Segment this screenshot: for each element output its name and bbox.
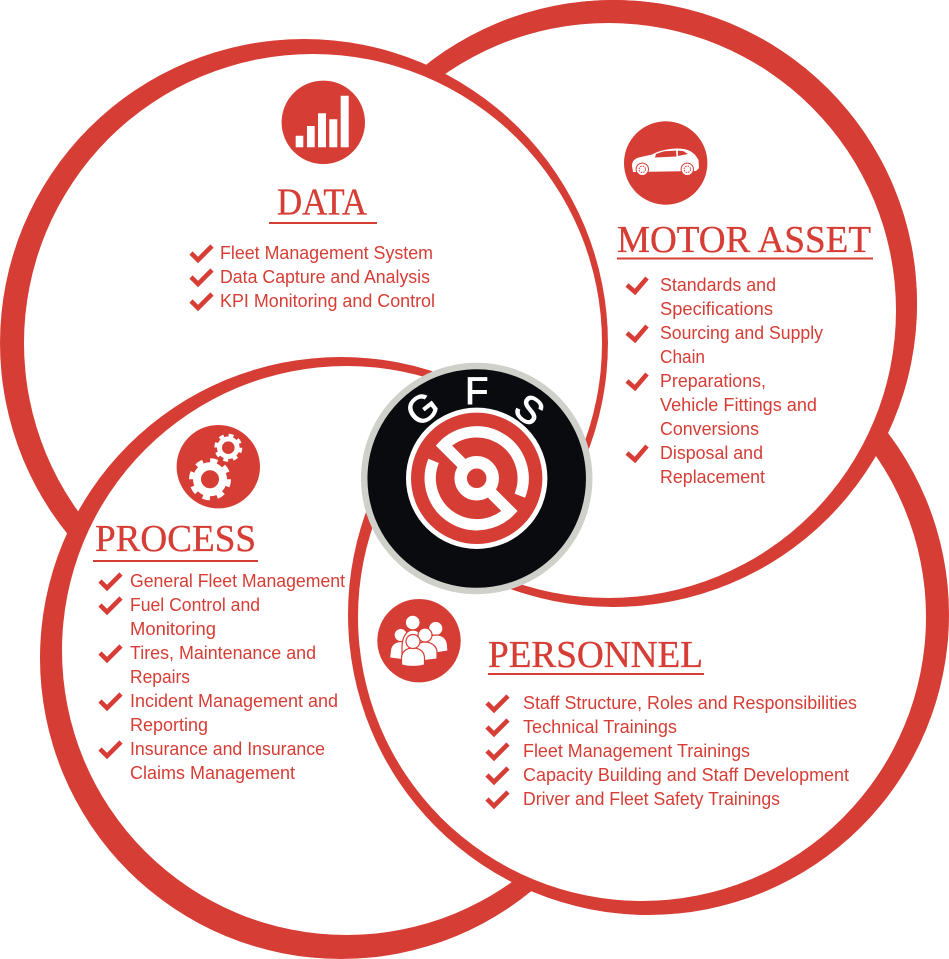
panel: process — [93, 425, 345, 783]
checklist: motor asset: Preparations, — [660, 371, 766, 391]
checklist: process — [100, 571, 345, 783]
checklist: motor asset: Replacement — [660, 467, 765, 487]
heading underline — [269, 222, 377, 224]
ring: data — [0, 39, 608, 647]
checklist: data: Fleet Management System — [220, 243, 433, 263]
checklist: personnel: Capacity Building and Staff Development — [523, 765, 849, 785]
checklist: data — [191, 243, 435, 311]
icon: gears — [177, 425, 260, 508]
checklist: process: Claims Management — [130, 763, 295, 783]
ring: personnel — [348, 433, 949, 915]
checklist: process: Monitoring — [130, 619, 216, 639]
checklist: personnel: Driver and Fleet Safety Trainings — [523, 789, 780, 809]
heading: process: PROCESS — [95, 518, 256, 560]
icon: people — [377, 599, 461, 682]
logo letters — [398, 371, 552, 435]
icon: car — [624, 121, 707, 205]
checklist: personnel — [487, 693, 857, 809]
checklist: personnel: Technical Trainings — [523, 717, 677, 737]
checklist: process: Reporting — [130, 715, 208, 735]
heading: data: DATA — [277, 182, 367, 224]
checklist: motor asset: Standards and — [660, 275, 776, 295]
checklist: motor asset: Vehicle Fittings and — [660, 395, 817, 415]
heading underline — [93, 560, 258, 562]
logo letters: G — [398, 384, 448, 435]
logo letters: S — [506, 386, 552, 435]
icon: bar chart — [282, 81, 365, 164]
checklist: process: Tires, Maintenance and — [130, 643, 316, 663]
logo: GFS centre badge — [364, 366, 589, 591]
checklist: motor asset — [627, 275, 823, 487]
heading underline — [617, 258, 873, 260]
heading underline — [488, 673, 704, 675]
ring: motor asset overlap — [426, 0, 917, 607]
checklist: motor asset: Disposal and — [660, 443, 763, 463]
checklist: motor asset: Specifications — [660, 299, 773, 319]
ring: process — [40, 357, 642, 959]
checklist: motor asset: Sourcing and Supply — [660, 323, 823, 343]
checklist: process: General Fleet Management — [130, 571, 345, 591]
heading: motor asset: MOTOR ASSET — [617, 219, 871, 261]
checklist: personnel: Staff Structure, Roles and Responsibilities — [523, 693, 857, 713]
logo letters: F — [465, 371, 488, 413]
checklist: motor asset: Conversions — [660, 419, 759, 439]
checklist: process: Fuel Control and — [130, 595, 260, 615]
panel: personnel — [377, 599, 857, 809]
checklist: personnel: Fleet Management Trainings — [523, 741, 750, 761]
heading: personnel: PERSONNEL — [488, 634, 703, 676]
checklist: process: Insurance and Insurance — [130, 739, 325, 759]
checklist: process: Repairs — [130, 667, 190, 687]
panel: motor asset — [617, 121, 873, 487]
logo mark: steering spiral — [430, 432, 523, 525]
panel: data — [191, 81, 435, 311]
checklist: motor asset: Chain — [660, 347, 705, 367]
ring: motor asset base — [310, 0, 917, 607]
checklist: data: KPI Monitoring and Control — [220, 291, 435, 311]
checklist: process: Incident Management and — [130, 691, 338, 711]
checklist: data: Data Capture and Analysis — [220, 267, 430, 287]
